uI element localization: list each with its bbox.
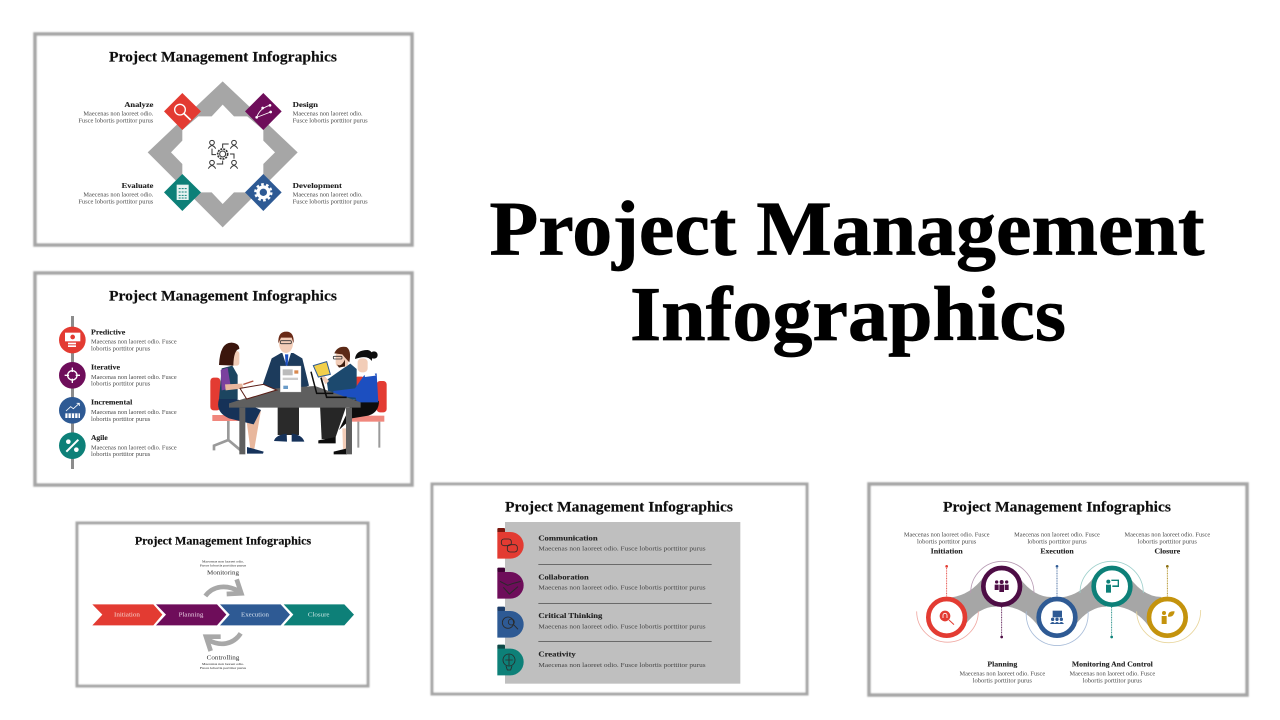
item: collaboration: Collaboration bbox=[538, 573, 589, 582]
woman right bbox=[333, 350, 379, 454]
item: agile: Agile bbox=[91, 433, 108, 442]
label: design: Maecenas non laoreet odio. bbox=[293, 111, 363, 117]
label: development bbox=[293, 181, 368, 205]
arrow: controlling bbox=[206, 633, 241, 651]
item: predictive: Maecenas non laoreet odio. Fusce bbox=[91, 340, 177, 346]
leader dots bbox=[945, 565, 1169, 638]
panel: skills slide bbox=[432, 484, 807, 694]
item: predictive bbox=[59, 327, 177, 353]
label: closure: Closure bbox=[1154, 548, 1180, 556]
item: agile: lobortis porttitor purus bbox=[91, 452, 151, 458]
chevron: closure: Closure bbox=[308, 612, 330, 619]
item: critical thinking: Critical Thinking bbox=[538, 611, 603, 620]
node: initiation bbox=[928, 599, 965, 636]
label: monitoring and control: Maecenas non laoreet odio. Fusce bbox=[1069, 672, 1155, 678]
item: agile bbox=[59, 432, 177, 459]
item: incremental: lobortis porttitor purus bbox=[91, 417, 151, 423]
label: initiation bbox=[904, 532, 990, 556]
label: execution: Execution bbox=[1040, 548, 1074, 556]
chevron: execution: Execution bbox=[241, 612, 270, 619]
item: iterative bbox=[59, 362, 177, 389]
main title bbox=[490, 186, 1205, 357]
dotted leader lines bbox=[947, 566, 1167, 637]
label: closure: lobortis porttitor purus bbox=[1138, 539, 1198, 545]
node: monitoring and control bbox=[1094, 568, 1130, 605]
item: critical thinking bbox=[497, 607, 706, 638]
item: agile: Maecenas non laoreet odio. Fusce bbox=[91, 445, 177, 451]
item: communication: Communication bbox=[538, 534, 598, 543]
label: initiation: Initiation bbox=[931, 548, 963, 556]
label: analyze: Maecenas non laoreet odio. bbox=[83, 111, 154, 117]
label: planning: Maecenas non laoreet odio. Fusce bbox=[959, 672, 1045, 678]
item: incremental bbox=[59, 397, 177, 424]
label: planning: Planning bbox=[987, 661, 1018, 669]
controlling label: Controlling bbox=[207, 654, 240, 661]
panel: diamond cycle slide bbox=[35, 34, 412, 245]
item: communication: Maecenas non laoreet odio. Fusce lobortis porttitor purus bbox=[538, 547, 706, 553]
item: creativity bbox=[497, 645, 706, 675]
label: monitoring and control: lobortis porttitor purus bbox=[1083, 679, 1143, 685]
slide title: Project Management Infographics bbox=[505, 499, 733, 515]
label: analyze: Fusce lobortis porttitor purus bbox=[78, 118, 154, 124]
label: development: Maecenas non laoreet odio. bbox=[293, 192, 363, 198]
item: iterative: Iterative bbox=[91, 363, 121, 372]
decorative arcs bbox=[917, 561, 1201, 646]
item: incremental: Incremental bbox=[91, 398, 132, 407]
monitoring label bbox=[200, 559, 247, 577]
label: development: Development bbox=[293, 181, 343, 190]
item: iterative: Maecenas non laoreet odio. Fusce bbox=[91, 375, 177, 381]
main title: Project Management bbox=[490, 186, 1205, 272]
label: initiation: Maecenas non laoreet odio. Fusce bbox=[904, 532, 990, 538]
monitoring label: Monitoring bbox=[207, 570, 240, 577]
woman left bbox=[218, 343, 264, 454]
icon: people around gear bbox=[208, 140, 238, 169]
grey connector band bbox=[951, 577, 1161, 626]
item: creativity: Maecenas non laoreet odio. Fusce lobortis porttitor purus bbox=[538, 663, 706, 669]
chevron: planning bbox=[156, 604, 226, 625]
icon: analyze magnifier diamond bbox=[164, 93, 201, 130]
chevron: execution bbox=[220, 604, 290, 625]
item: communication bbox=[497, 528, 706, 559]
icon: development gear diamond bbox=[245, 174, 282, 211]
label: design: Fusce lobortis porttitor purus bbox=[293, 118, 368, 124]
chevron: initiation: Initiation bbox=[114, 612, 141, 619]
man right bbox=[318, 347, 357, 443]
grey diamond ring bbox=[148, 81, 298, 227]
arrow: monitoring bbox=[205, 579, 241, 596]
illustration: team meeting bbox=[210, 332, 387, 454]
label: design: Design bbox=[293, 100, 319, 109]
label: monitoring and control bbox=[1069, 661, 1155, 685]
slide title: Project Management Infographics bbox=[135, 535, 312, 548]
node: closure bbox=[1149, 599, 1186, 636]
label: closure: Maecenas non laoreet odio. Fusce bbox=[1124, 532, 1210, 538]
item: creativity: Creativity bbox=[538, 650, 576, 659]
item: critical thinking: Maecenas non laoreet odio. Fusce lobortis porttitor purus bbox=[538, 624, 706, 630]
man center bbox=[262, 332, 309, 442]
laptops and book bbox=[311, 362, 347, 397]
slide title: Project Management Infographics bbox=[943, 499, 1171, 515]
node: planning bbox=[983, 568, 1020, 605]
label: execution: Maecenas non laoreet odio. Fusce bbox=[1014, 532, 1100, 538]
label: planning: lobortis porttitor purus bbox=[973, 679, 1033, 685]
chevron: initiation bbox=[92, 604, 162, 625]
label: execution bbox=[1014, 532, 1100, 556]
controlling label: Fusce lobortis porttitor purus bbox=[200, 666, 247, 670]
main title: Infographics bbox=[630, 271, 1066, 357]
controlling label bbox=[200, 654, 247, 670]
item: iterative: lobortis porttitor purus bbox=[91, 382, 151, 388]
label: closure bbox=[1124, 532, 1210, 556]
panel: project lifecycle slide bbox=[869, 484, 1247, 695]
label: development: Fusce lobortis porttitor purus bbox=[293, 199, 368, 205]
grey backing panel bbox=[505, 522, 740, 684]
item: predictive: lobortis porttitor purus bbox=[91, 347, 151, 353]
icon: evaluate checklist diamond bbox=[164, 174, 201, 211]
item: collaboration: Maecenas non laoreet odio. Fusce lobortis porttitor purus bbox=[538, 586, 706, 592]
label: execution: lobortis porttitor purus bbox=[1027, 539, 1087, 545]
chevron: planning: Planning bbox=[179, 612, 204, 619]
label: evaluate bbox=[78, 181, 154, 205]
label: initiation: lobortis porttitor purus bbox=[917, 539, 977, 545]
monitoring label: Maecenas non laoreet odio. bbox=[202, 559, 244, 563]
notebook bbox=[240, 381, 277, 399]
label: evaluate: Fusce lobortis porttitor purus bbox=[78, 199, 154, 205]
panel: process chevrons slide bbox=[77, 523, 368, 686]
item: collaboration bbox=[497, 568, 706, 599]
slide title: Project Management Infographics bbox=[109, 288, 337, 304]
panel: methodologies slide bbox=[35, 273, 412, 485]
vertical timeline bbox=[71, 316, 74, 469]
chevron: closure bbox=[284, 604, 354, 625]
document bbox=[280, 366, 301, 392]
monitoring label: Fusce lobortis porttitor purus bbox=[200, 563, 247, 567]
label: analyze bbox=[78, 100, 154, 124]
chairs bbox=[210, 377, 387, 450]
label: planning bbox=[959, 661, 1045, 685]
icon: design curve diamond bbox=[245, 93, 282, 130]
item: predictive: Predictive bbox=[91, 327, 126, 336]
label: analyze: Analyze bbox=[124, 100, 154, 109]
label: evaluate: Evaluate bbox=[122, 181, 154, 190]
item: incremental: Maecenas non laoreet odio. Fusce bbox=[91, 410, 177, 416]
label: design bbox=[293, 100, 368, 124]
slide title: Project Management Infographics bbox=[109, 49, 337, 65]
node: execution bbox=[1039, 599, 1075, 636]
label: monitoring and control: Monitoring And Control bbox=[1072, 661, 1153, 669]
label: evaluate: Maecenas non laoreet odio. bbox=[83, 192, 154, 198]
controlling label: Maecenas non laoreet odio. bbox=[202, 662, 244, 666]
table bbox=[229, 386, 361, 454]
